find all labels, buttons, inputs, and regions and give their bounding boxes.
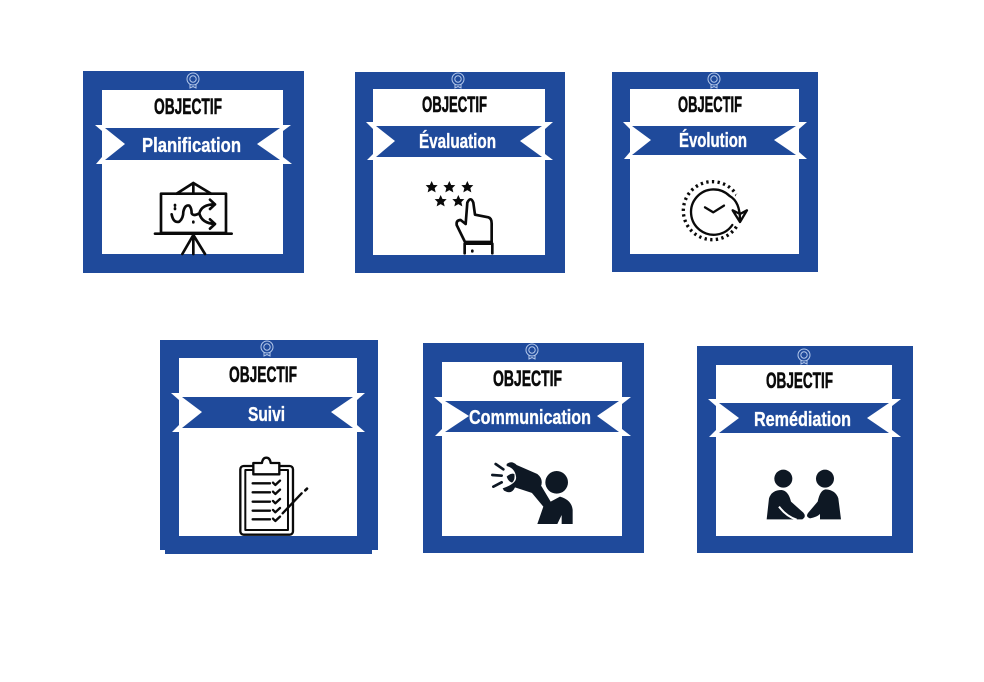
ribbon <box>623 122 807 159</box>
heading: objectif: OBJECTIF <box>678 92 742 117</box>
icon: clock with arrow <box>683 182 747 240</box>
icon: medal <box>452 73 464 88</box>
ribbon <box>171 393 365 432</box>
heading: objectif: OBJECTIF <box>154 94 222 119</box>
ribbon: Planification <box>142 135 241 157</box>
heading: objectif: OBJECTIF <box>766 368 833 393</box>
icon: medal <box>261 341 273 356</box>
heading: objectif: OBJECTIF <box>422 92 487 117</box>
panel: Suivi <box>160 340 378 554</box>
icon: medal <box>187 73 199 88</box>
ribbon: Remédiation <box>754 409 851 431</box>
ribbon: Communication <box>469 407 591 429</box>
ribbon <box>434 397 631 436</box>
panel: Évaluation <box>355 72 565 273</box>
ribbon <box>366 122 553 160</box>
panel: Planification <box>83 71 304 273</box>
icon: medal <box>526 344 538 359</box>
icon: medal <box>798 349 810 364</box>
heading: objectif: OBJECTIF <box>493 366 562 391</box>
ribbon <box>708 399 901 437</box>
icon: person with megaphone <box>492 462 573 524</box>
ribbon: Évaluation <box>419 130 496 153</box>
panel: Communication <box>423 343 644 553</box>
icon: two people meeting <box>767 470 841 520</box>
ribbon: Suivi <box>248 404 285 426</box>
icon: presentation board <box>155 183 232 254</box>
ribbon <box>95 125 292 164</box>
panel: Évolution <box>612 72 818 272</box>
icon: clipboard checklist <box>240 458 307 535</box>
panel: Remédiation <box>697 346 913 553</box>
icon: hand and stars <box>426 181 492 253</box>
heading: objectif: OBJECTIF <box>229 362 297 387</box>
icon: medal <box>708 73 720 88</box>
ribbon: Évolution <box>679 129 747 152</box>
